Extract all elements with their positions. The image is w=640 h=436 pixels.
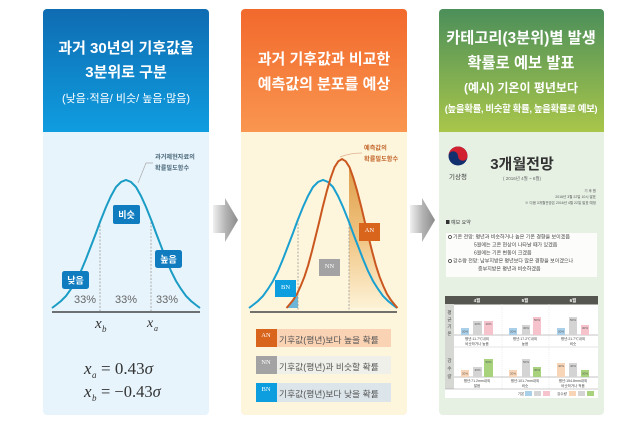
table: monthly outlook: 기 bbox=[447, 323, 452, 330]
axis labels: a bbox=[154, 324, 158, 333]
bars: precipitation bbox=[461, 359, 589, 377]
legend: NN: 기후값(평년)과 비슷할 확률 bbox=[279, 361, 379, 372]
section: forecast summary: 기온 전망: 평년과 비슷하거나 높은 기온 경향을 보이겠음 bbox=[453, 234, 570, 240]
document date bbox=[525, 188, 597, 205]
document title: 3개월전망 bbox=[490, 156, 554, 173]
bars: temperature: 20% bbox=[558, 330, 564, 334]
bars: precipitation: 50% bbox=[485, 360, 492, 364]
label: forecast density: 확률밀도함수 bbox=[364, 155, 398, 163]
heading: compare bbox=[258, 51, 390, 93]
label: probability density bbox=[138, 153, 195, 183]
document date: 2016년 3월 22일 10시 발표 bbox=[555, 194, 597, 199]
panel: forecast distribution bbox=[241, 9, 407, 415]
heading: past 30 years bbox=[58, 40, 194, 105]
table: monthly outlook: 5월 bbox=[522, 297, 528, 304]
table legend: 강수량 bbox=[557, 391, 568, 396]
formula: b bbox=[92, 393, 97, 403]
bar captions: 평년:71.2mm내외 bbox=[464, 378, 490, 383]
bars: temperature: 50% bbox=[534, 318, 540, 322]
section: forecast summary: 예보 요약 bbox=[451, 219, 471, 226]
panel: past climate terciles bbox=[43, 9, 209, 415]
formula: x bbox=[83, 359, 92, 378]
section: forecast summary bbox=[446, 219, 597, 277]
table: monthly outlook: 균 bbox=[447, 317, 452, 322]
badge: similar bbox=[113, 205, 140, 224]
table legend: 기온 bbox=[518, 391, 525, 396]
percent labels: 33% bbox=[74, 294, 96, 306]
bar captions: 평년:154.8mm내외 bbox=[559, 378, 587, 383]
heading: category: 확률로 예보 발표 bbox=[467, 55, 575, 72]
table legend bbox=[518, 391, 594, 396]
table: monthly outlook: 온 bbox=[447, 331, 452, 336]
bars: temperature bbox=[461, 317, 589, 335]
bar captions: 평년:11.7℃내외 bbox=[465, 336, 489, 341]
bars: precipitation: 30% bbox=[474, 368, 481, 372]
bars: precipitation: 20% bbox=[462, 372, 468, 376]
legend: BN bbox=[256, 383, 391, 402]
table: monthly outlook: 6월 bbox=[570, 297, 576, 304]
bars: precipitation: 50% bbox=[523, 360, 529, 364]
chart: normal distribution bbox=[52, 153, 200, 334]
axis labels: b bbox=[102, 324, 107, 334]
legend: NN bbox=[256, 356, 391, 374]
label: forecast density bbox=[340, 144, 398, 163]
heading: compare: 예측값의 분포를 예상 bbox=[258, 76, 390, 93]
badge: NN bbox=[319, 259, 340, 276]
bar captions: 비슷하거나 적음 bbox=[561, 383, 586, 388]
percent labels: 33% bbox=[156, 294, 178, 306]
panel 1 header bbox=[43, 9, 209, 132]
legend: AN: AN bbox=[261, 332, 271, 339]
badge: NN: NN bbox=[325, 263, 334, 270]
formula: x bbox=[83, 382, 92, 401]
badge: high: 높음 bbox=[160, 254, 177, 264]
badge: high bbox=[155, 250, 182, 268]
label: probability density: 확률밀도함수 bbox=[155, 164, 189, 172]
percent labels: 33% bbox=[115, 294, 137, 306]
section: forecast summary: 강수량 전망: 남부지방은 평년보다 많은 경향을 보이겠으나 bbox=[453, 258, 574, 264]
label: forecast density: 예측값의 bbox=[364, 144, 387, 152]
badge: low: 낮음 bbox=[67, 274, 84, 286]
chart: shifted distribution bbox=[249, 144, 398, 312]
label: probability density: 과거제현자료의 bbox=[155, 153, 195, 161]
percent labels bbox=[74, 294, 178, 306]
bars: precipitation: 20% bbox=[510, 372, 516, 376]
bars: temperature: 40% bbox=[485, 322, 492, 326]
bars: temperature: 30% bbox=[523, 326, 529, 330]
bars: precipitation: 40% bbox=[558, 364, 564, 368]
axis labels: x bbox=[146, 316, 154, 331]
document title bbox=[490, 156, 554, 182]
table: monthly outlook: 량 bbox=[447, 373, 452, 379]
formula: a bbox=[92, 370, 97, 380]
document date: 기 후 원 bbox=[584, 188, 596, 193]
section: forecast summary: 5월에는 고온 현상이 나타날 때가 있겠음 bbox=[474, 242, 558, 248]
section: forecast summary: 6월에는 기온 변동이 크겠음 bbox=[474, 250, 532, 256]
heading: category bbox=[445, 30, 597, 115]
document title: ( 2016년 4월 ~ 6월) bbox=[503, 175, 542, 182]
axis labels: x bbox=[94, 316, 102, 332]
heading: category: 카테고리(3분위)별 발생 bbox=[446, 30, 596, 47]
formula: = −0.43σ bbox=[101, 382, 162, 401]
bars: temperature: 20% bbox=[462, 330, 468, 334]
heading: past 30 years: 3분위로 구분 bbox=[85, 64, 167, 81]
bar captions: 평년:101.7mm내외 bbox=[511, 378, 539, 383]
heading: past 30 years: 과거 30년의 기후값을 bbox=[58, 40, 194, 57]
badge: similar: 비슷 bbox=[118, 209, 135, 220]
badge: AN: AN bbox=[365, 227, 374, 234]
heading: category: (예시) 기온이 평년보다 bbox=[464, 80, 578, 95]
arrow: step 1 to 2 bbox=[213, 198, 238, 242]
badge: BN: BN bbox=[281, 284, 290, 291]
formula: = 0.43σ bbox=[101, 359, 154, 378]
heading: category: (높을확률, 비슷할 확률, 높을확률로 예보) bbox=[445, 103, 597, 115]
axis labels bbox=[94, 316, 158, 334]
panel 2 header bbox=[241, 9, 407, 132]
icon: KMA logo bbox=[448, 146, 468, 181]
bar captions: 많음 bbox=[474, 383, 481, 388]
document date: ※ 다음 3개월전망은 2016년 4월 22일 발표 예정 bbox=[525, 200, 596, 205]
legend: AN: 기후값(평년)보다 높을 확률 bbox=[279, 334, 379, 345]
bars: temperature: 50% bbox=[570, 318, 576, 322]
panel: category probability forecast bbox=[439, 9, 604, 415]
badge: BN bbox=[275, 280, 296, 297]
badge: AN bbox=[359, 223, 380, 241]
table: monthly outlook: 4월 bbox=[474, 297, 480, 304]
table: monthly outlook: 강 bbox=[447, 357, 452, 363]
badge: low bbox=[62, 271, 89, 289]
bars: temperature: 40% bbox=[474, 322, 481, 326]
bar captions: 비슷 bbox=[522, 383, 529, 388]
table: monthly outlook bbox=[445, 296, 598, 398]
bar captions: 비슷하거나 높음 bbox=[465, 341, 490, 346]
legend: NN: NN bbox=[261, 359, 271, 366]
heading: past 30 years: (낮음·적음/ 비슷/ 높음·많음) bbox=[62, 92, 190, 105]
arrow: step 2 to 3 bbox=[410, 198, 435, 242]
icon: KMA logo: 기상청 bbox=[449, 172, 467, 181]
section: forecast summary: 중부지방은 평년과 비슷하겠음 bbox=[478, 266, 541, 272]
table: monthly outlook: 수 bbox=[447, 366, 452, 372]
bar captions bbox=[464, 336, 587, 388]
panel 3 header bbox=[439, 9, 604, 132]
bars: temperature: 20% bbox=[510, 330, 516, 334]
bars: precipitation: 40% bbox=[570, 364, 576, 368]
bar captions: 비슷 bbox=[570, 341, 577, 346]
formula bbox=[83, 359, 162, 403]
table: monthly outlook: 평 bbox=[447, 309, 452, 315]
bar captions: 높음 bbox=[522, 341, 529, 346]
bars: precipitation: 20% bbox=[582, 372, 588, 376]
legend: BN: 기후값(평년)보다 낮을 확률 bbox=[279, 388, 379, 399]
bars: precipitation: 30% bbox=[534, 368, 540, 372]
legend: AN bbox=[256, 329, 391, 347]
bar captions: 평년:21.7℃내외 bbox=[561, 336, 585, 341]
legend: BN: BN bbox=[261, 386, 271, 393]
heading: compare: 과거 기후값과 비교한 bbox=[258, 51, 390, 68]
bar captions: 평년:17.2℃내외 bbox=[513, 336, 537, 341]
bars: temperature: 30% bbox=[582, 326, 588, 330]
